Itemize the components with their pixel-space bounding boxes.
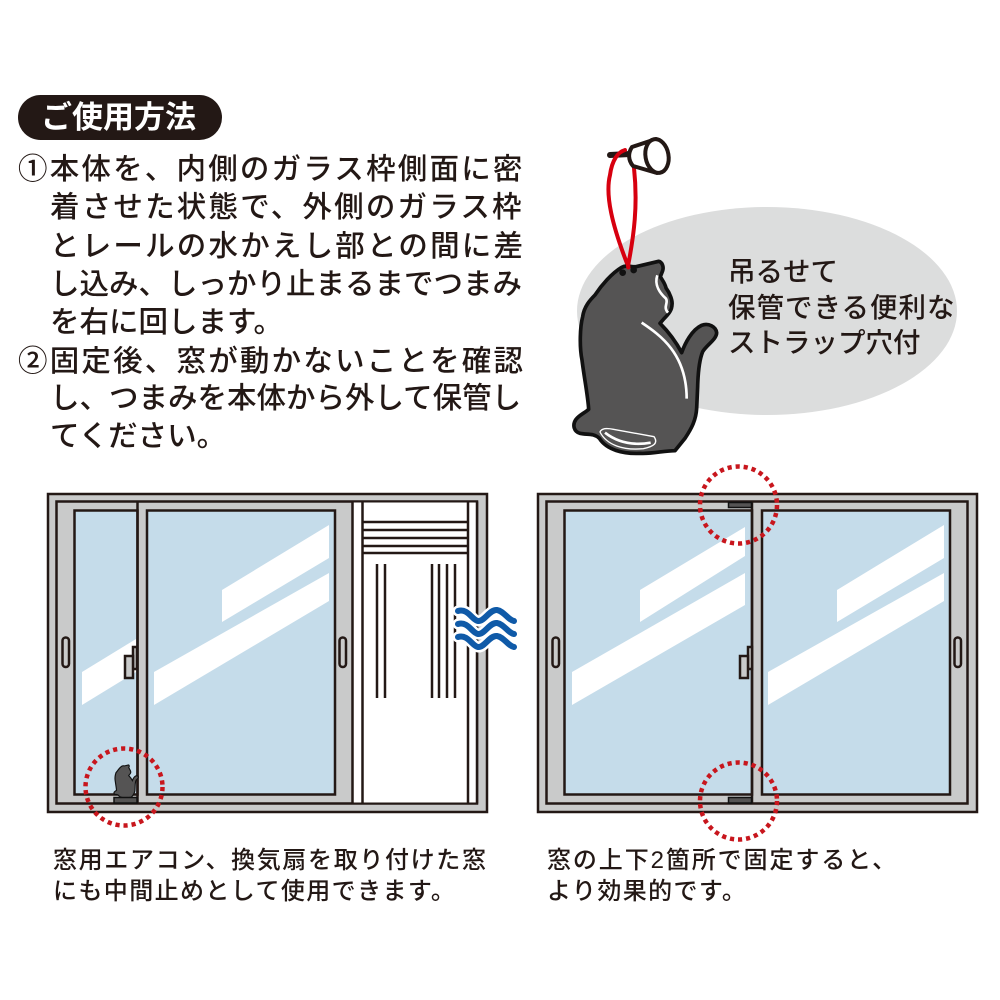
instructions text: とレールの水かえし部との間に差 bbox=[50, 230, 525, 263]
instructions text: ①本体を、内側のガラス枠側面に密 bbox=[18, 153, 525, 186]
heading pill bbox=[18, 95, 222, 140]
instructions text: し、つまみを本体から外して保管し bbox=[50, 382, 521, 415]
inner frame line bbox=[56, 502, 477, 804]
instructions text bbox=[18, 153, 525, 453]
right caption: より効果的です。 bbox=[547, 878, 747, 905]
bottom stopper bbox=[728, 798, 752, 803]
top stopper bbox=[728, 502, 752, 508]
red dotted circle: top bbox=[700, 466, 777, 544]
red dotted circle: left window bbox=[86, 748, 162, 826]
callout text: 吊るせて bbox=[728, 256, 838, 287]
glass reflections bbox=[82, 525, 329, 705]
left caption bbox=[53, 847, 488, 905]
heading pill: ご使用方法 bbox=[41, 100, 196, 135]
right pane glass bbox=[762, 510, 950, 794]
left pane glass bbox=[564, 510, 752, 794]
red strap bbox=[608, 150, 636, 266]
cat body bbox=[574, 261, 717, 453]
glass reflections bbox=[572, 525, 944, 705]
outer frame bbox=[48, 494, 487, 812]
right pane glass bbox=[147, 510, 335, 794]
left pane glass bbox=[74, 510, 138, 794]
outer frame bbox=[538, 494, 977, 812]
left caption: 窓用エアコン、換気扇を取り付けた窓 bbox=[53, 847, 488, 874]
callout text: 保管できる便利な bbox=[728, 292, 955, 323]
knob cup bbox=[629, 137, 671, 175]
mini cat stopper bbox=[114, 765, 138, 803]
inner frame line bbox=[546, 502, 968, 804]
callout text: ストラップ穴付 bbox=[728, 327, 920, 358]
instructions text: 着させた状態で、外側のガラス枠 bbox=[50, 191, 524, 224]
sash divider bbox=[751, 501, 753, 803]
instructions text: てください。 bbox=[50, 420, 226, 453]
icon: hanging cat strap bbox=[574, 137, 717, 453]
instructions text: し込み、しっかり止まるまでつまみ bbox=[50, 268, 522, 301]
right caption bbox=[547, 847, 898, 905]
instructions text: を右に回します。 bbox=[50, 306, 283, 339]
red dotted circle: bottom bbox=[700, 762, 777, 840]
callout text bbox=[728, 256, 955, 358]
handles bbox=[552, 638, 961, 678]
white air conditioner panel bbox=[352, 502, 477, 804]
left caption: にも中間止めとして使用できます。 bbox=[53, 878, 456, 905]
instructions text: ②固定後、窓が動かないことを確認 bbox=[18, 345, 525, 378]
knob stick bbox=[610, 154, 630, 155]
handles bbox=[62, 638, 346, 678]
left window bbox=[48, 494, 487, 812]
right window bbox=[538, 494, 977, 812]
sash divider bbox=[136, 501, 139, 803]
icon: wave break symbol bbox=[458, 610, 514, 647]
right caption: 窓の上下2箇所で固定すると、 bbox=[547, 847, 898, 874]
gray callout ellipse bbox=[577, 207, 957, 415]
